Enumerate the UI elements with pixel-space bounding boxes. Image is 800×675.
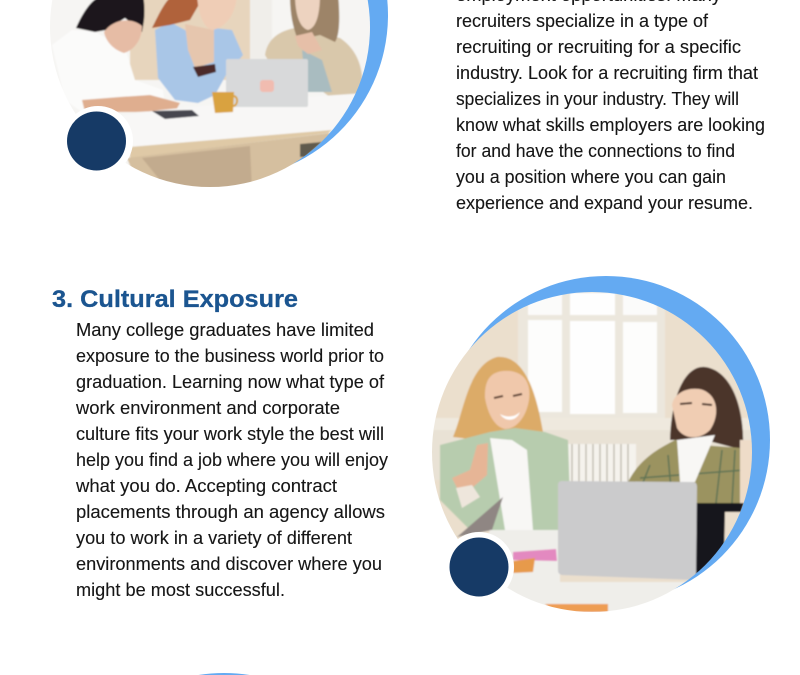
text block: section 3 body: help you find a job where you will enjoy bbox=[76, 449, 389, 470]
text block: section 2 body: for and have the connections to find bbox=[456, 140, 735, 161]
next section crescent, top edge bbox=[198, 673, 250, 675]
middle woman bbox=[155, 22, 243, 103]
photo: two women with a laptop bbox=[426, 285, 760, 620]
text block: section 3 body: placements through an agency allows bbox=[76, 501, 385, 522]
text block: section 3 body: work environment and corporate bbox=[75, 397, 340, 418]
text block: section 3 body: you to work in a variety of different bbox=[76, 527, 352, 548]
calculator bbox=[152, 110, 199, 119]
badge: navy dot bbox=[450, 538, 508, 596]
text block: section 3 body: exposure to the business world prior to bbox=[76, 345, 384, 366]
laptop bbox=[226, 59, 308, 107]
text block: section 2 body: recruiters specialize in a type of bbox=[456, 10, 709, 31]
laptop bbox=[558, 481, 697, 580]
panel: section 3 photo bbox=[426, 276, 770, 620]
mug bbox=[212, 92, 234, 113]
right woman bbox=[670, 367, 743, 450]
text block: section 3 body bbox=[75, 319, 389, 600]
badge: white ring bbox=[444, 532, 514, 602]
text block: section 2 body bbox=[456, 0, 765, 213]
table bbox=[154, 92, 356, 112]
heading: 3. Cultural Exposure: 3. Cultural Exposure bbox=[52, 286, 298, 313]
badge: white ring bbox=[63, 106, 133, 176]
text block: section 2 body: recruiting or recruiting for a specific bbox=[456, 36, 741, 57]
decorative blue crescent, section 3 bbox=[442, 276, 770, 604]
right woman bbox=[265, 28, 363, 97]
decorative blue crescent, section 2 bbox=[60, 0, 388, 179]
dark monitor bbox=[695, 503, 744, 578]
text block: section 3 body: might be most successful. bbox=[76, 579, 285, 600]
table and papers bbox=[488, 529, 686, 612]
photo: three women at a table bbox=[44, 0, 380, 192]
text block: section 2 body: know what skills employers are looking bbox=[456, 114, 765, 135]
text block: section 3 body: culture fits your work style the best will bbox=[76, 423, 384, 444]
text block: section 3 body: environments and discover where you bbox=[76, 553, 382, 574]
text block: section 3 body: Many college graduates have limited bbox=[76, 319, 374, 340]
text block: section 3 body: what you do. Accepting contract bbox=[75, 475, 337, 496]
badge: navy dot bbox=[67, 112, 126, 170]
text block: section 2 body: specializes in your industry. They will bbox=[456, 88, 739, 109]
radiator bbox=[566, 444, 636, 484]
panel: section 2 photo bbox=[44, 0, 388, 192]
text block: section 2 body: you a position where you can gain bbox=[456, 166, 726, 187]
window bbox=[518, 292, 665, 418]
text block: section 3 body: graduation. Learning now what type of bbox=[76, 371, 385, 392]
text block: section 2 body: experience and expand your resume. bbox=[456, 192, 753, 213]
text block: section 2 body: industry. Look for a recruiting firm that bbox=[456, 62, 758, 83]
left woman bbox=[453, 357, 546, 445]
left woman bbox=[128, 64, 136, 82]
